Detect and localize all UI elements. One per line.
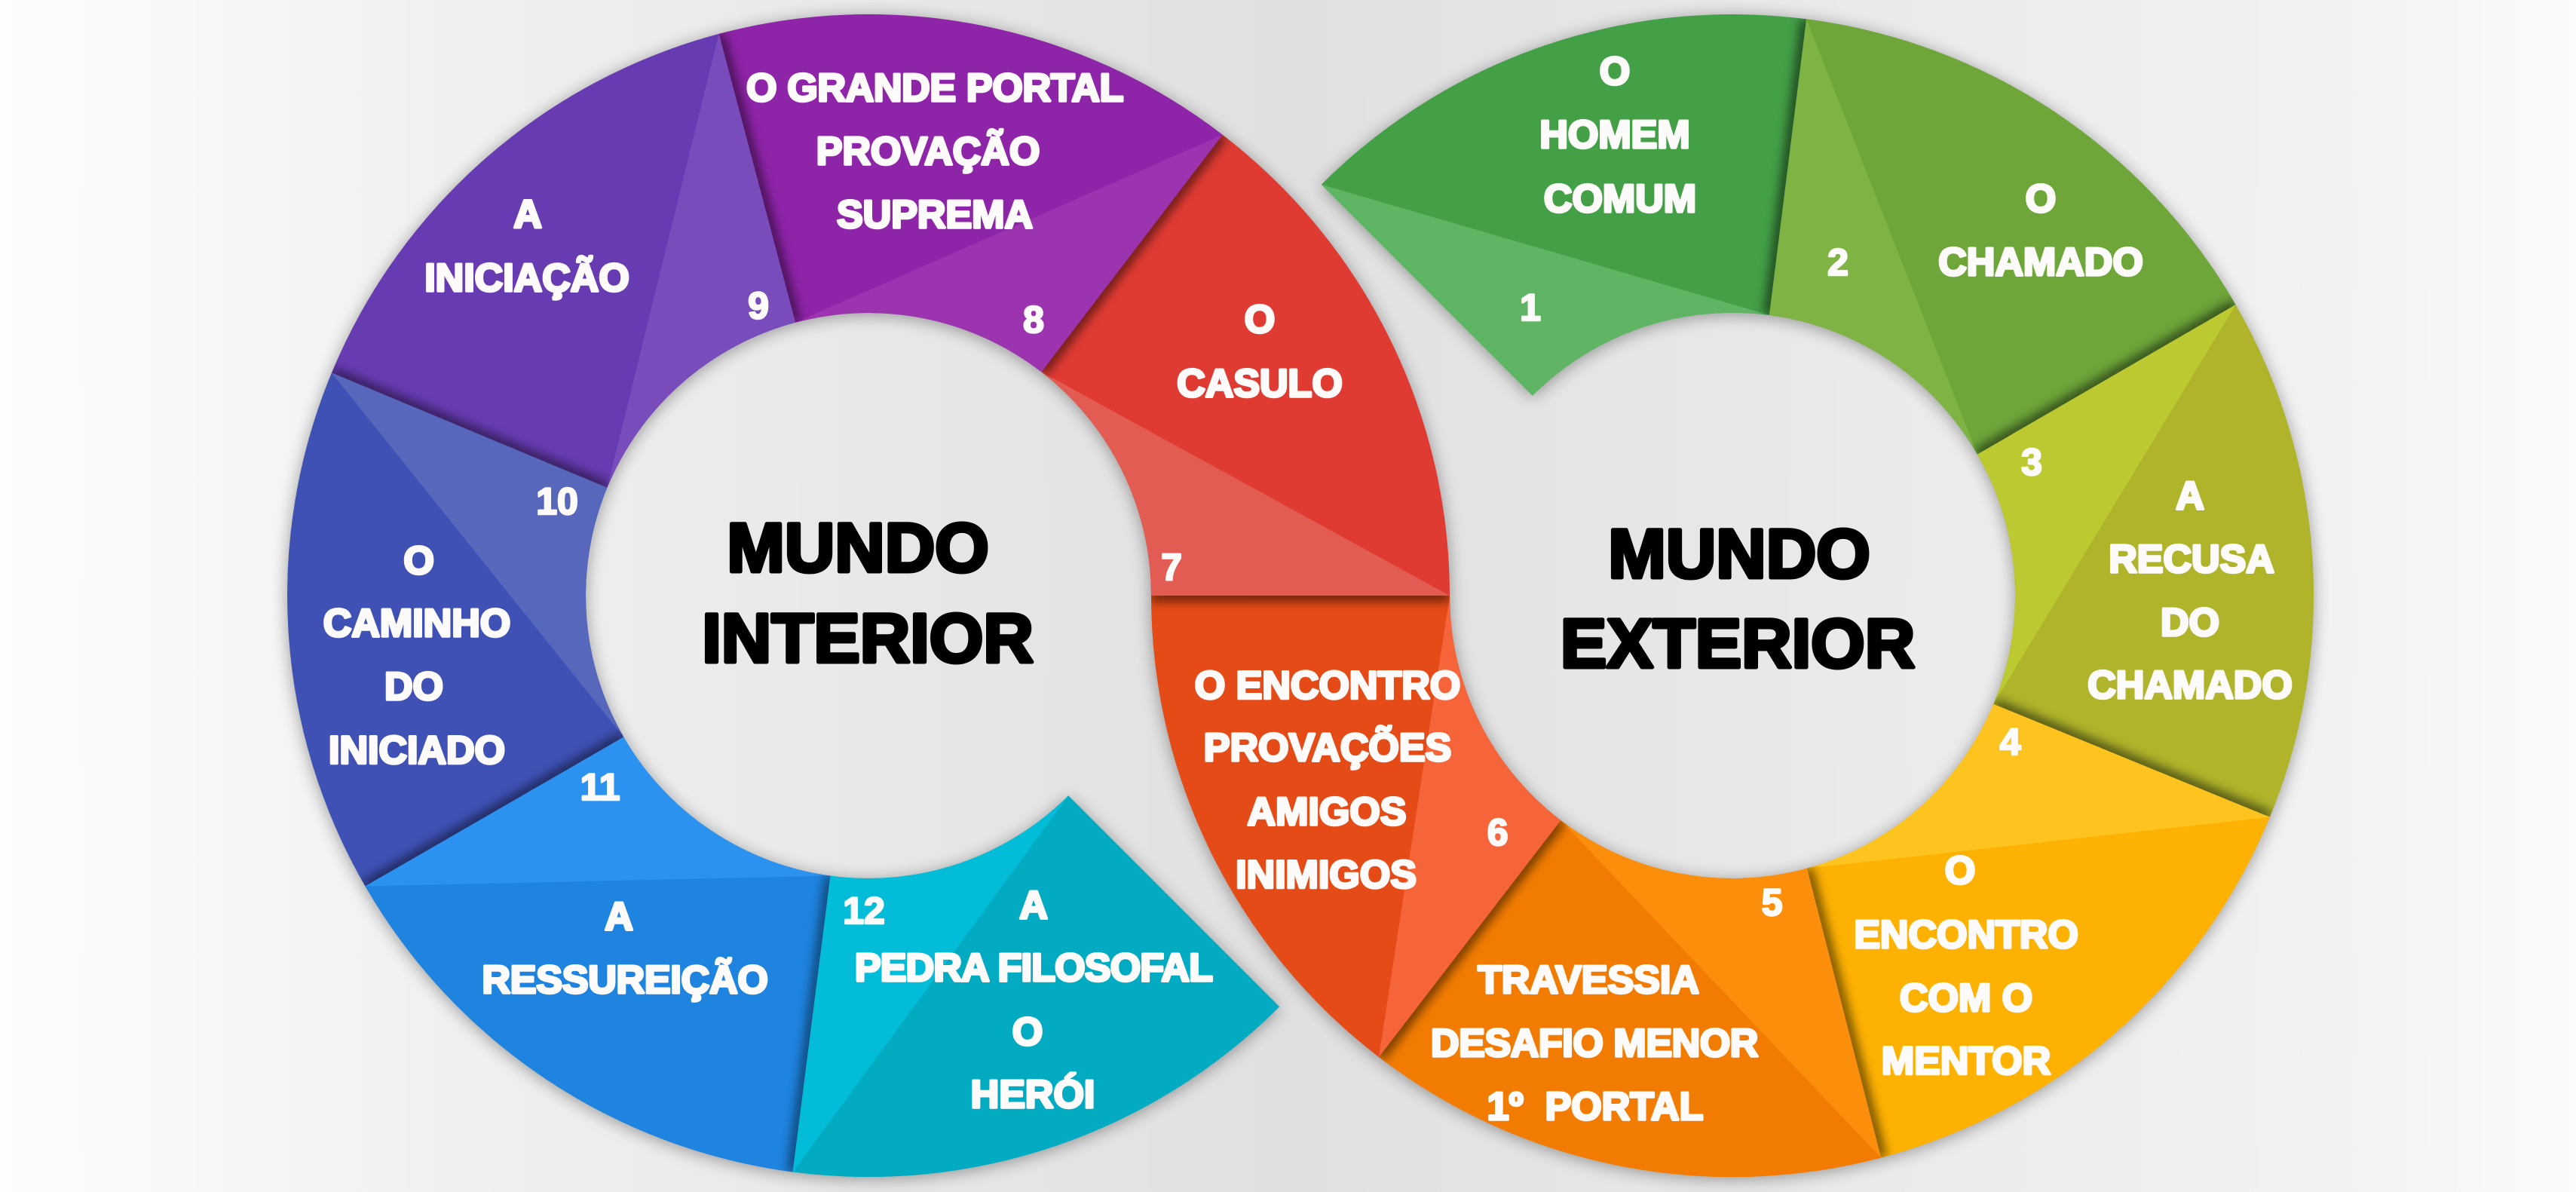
segment 10 base bbox=[287, 372, 623, 887]
label: O chamado bbox=[1938, 177, 2143, 284]
segment 6 edge shadow bbox=[1151, 590, 1450, 601]
segment 1 edge shadow bbox=[1769, 19, 1806, 315]
panel: segment 4 O encontro com o mentor bbox=[1807, 704, 2270, 1158]
heading: Mundo Exterior: MUNDO bbox=[1608, 516, 1870, 593]
segment 8 light facet bbox=[795, 135, 1223, 372]
panel: segment 6 O encontro, provações, amigos, inimigos bbox=[1151, 596, 1561, 1057]
label: O chamado: O bbox=[2026, 177, 2056, 221]
segment 2 base bbox=[1769, 19, 2236, 455]
label: O homem comum: O bbox=[1600, 50, 1630, 93]
label: O grande portal, provação suprema bbox=[746, 66, 1123, 237]
panel: segment 12 A pedra filosofal, o herói bbox=[793, 795, 1279, 1177]
label: A ressureição: A bbox=[605, 895, 633, 939]
segment 9 light facet bbox=[607, 34, 795, 488]
label: O encontro com o mentor: ENCONTRO bbox=[1854, 913, 2078, 957]
label: O encontro, provações, amigos, inimigos: AMIGOS bbox=[1248, 790, 1406, 834]
segment 1 base bbox=[1322, 14, 1806, 396]
number 9: 9 bbox=[748, 285, 769, 327]
label: O grande portal, provação suprema: SUPREMA bbox=[837, 193, 1033, 237]
label: A pedra filosofal, o herói: HERÓI bbox=[971, 1073, 1095, 1117]
label: O encontro, provações, amigos, inimigos bbox=[1195, 664, 1460, 897]
segment 12 base bbox=[793, 795, 1279, 1177]
segment 4 light facet bbox=[1807, 704, 2270, 869]
heading: Mundo Interior bbox=[702, 510, 1034, 677]
label: O casulo: CASULO bbox=[1177, 362, 1343, 406]
panel: segment 2 O chamado bbox=[1769, 19, 2236, 455]
label: O casulo bbox=[1177, 298, 1343, 406]
segment 2 edge shadow bbox=[1977, 305, 2236, 455]
label: O caminho do iniciado bbox=[323, 539, 510, 773]
label: O grande portal, provação suprema: PROVAÇÃO bbox=[816, 129, 1040, 173]
panel: segment 10 O caminho do iniciado bbox=[287, 372, 623, 887]
segment 7 light facet bbox=[1041, 372, 1450, 596]
label: A iniciação bbox=[424, 193, 629, 300]
label: O homem comum: COMUM bbox=[1544, 177, 1696, 221]
label: O homem comum: HOMEM bbox=[1539, 113, 1690, 157]
label: Travessia, desafio menor, 1º portal bbox=[1431, 958, 1758, 1129]
number 10: 10 bbox=[536, 480, 578, 522]
label: O encontro, provações, amigos, inimigos: PROVAÇÕES bbox=[1204, 725, 1451, 770]
label: A recusa do chamado: CHAMADO bbox=[2087, 663, 2293, 707]
label: A pedra filosofal, o herói bbox=[855, 884, 1212, 1117]
segment 4 edge shadow bbox=[1807, 869, 1881, 1158]
label: O grande portal, provação suprema: O GRANDE PORTAL bbox=[746, 66, 1123, 110]
label: Travessia, desafio menor, 1º portal: TRAVESSIA bbox=[1478, 958, 1699, 1002]
segment 6 light facet bbox=[1379, 596, 1561, 1057]
segment 11 base bbox=[365, 737, 831, 1172]
segment 1 light facet bbox=[1322, 185, 1769, 396]
label: O encontro com o mentor: MENTOR bbox=[1882, 1039, 2051, 1083]
number 11: 11 bbox=[580, 766, 620, 808]
panel: segment 3 A recusa do chamado bbox=[1977, 305, 2314, 817]
segment 4 base bbox=[1807, 704, 2270, 1158]
number 2: 2 bbox=[1827, 241, 1849, 283]
segment 6 base bbox=[1151, 596, 1561, 1057]
label: O chamado: CHAMADO bbox=[1938, 241, 2143, 284]
label: O encontro com o mentor: O bbox=[1945, 849, 1975, 893]
segment 5 light facet bbox=[1561, 820, 1881, 1158]
number 4: 4 bbox=[2000, 721, 2021, 763]
segment 11 edge shadow bbox=[793, 876, 831, 1172]
label: A pedra filosofal, o herói: O bbox=[1012, 1010, 1043, 1054]
number 1: 1 bbox=[1520, 287, 1541, 329]
label: O homem comum bbox=[1539, 50, 1696, 221]
label: O caminho do iniciado: O bbox=[403, 539, 434, 583]
label: A recusa do chamado: A bbox=[2176, 474, 2204, 518]
number 12: 12 bbox=[843, 890, 885, 932]
label: O encontro com o mentor bbox=[1854, 849, 2078, 1083]
segment 2 light facet bbox=[1769, 19, 1977, 455]
number 8: 8 bbox=[1023, 299, 1044, 341]
segment 3 base bbox=[1977, 305, 2314, 817]
number 3: 3 bbox=[2021, 441, 2042, 483]
segment 9 edge shadow bbox=[332, 372, 607, 488]
segment 3 light facet bbox=[1977, 305, 2236, 704]
segment 3 edge shadow bbox=[1993, 704, 2270, 817]
label: A recusa do chamado: DO bbox=[2161, 601, 2219, 645]
panel: segment 5 Travessia bbox=[1379, 820, 1881, 1177]
label: O casulo: O bbox=[1245, 298, 1275, 342]
panel: segment 11 A ressureição bbox=[365, 737, 831, 1172]
segment 10 edge shadow bbox=[365, 737, 623, 887]
label: A recusa do chamado: RECUSA bbox=[2109, 538, 2274, 581]
number 6: 6 bbox=[1487, 811, 1509, 853]
heading: Mundo Exterior bbox=[1561, 516, 1915, 682]
segment 5 base bbox=[1379, 820, 1881, 1177]
segment 7 edge shadow bbox=[1041, 135, 1223, 372]
segment 10 light facet bbox=[332, 372, 623, 737]
segment 11 light facet bbox=[365, 737, 831, 887]
heading: Mundo Exterior: EXTERIOR bbox=[1561, 605, 1915, 682]
label: Travessia, desafio menor, 1º portal: DESAFIO MENOR bbox=[1431, 1022, 1758, 1065]
label: O caminho do iniciado: DO bbox=[384, 665, 443, 709]
label: A ressureição: RESSUREIÇÃO bbox=[482, 958, 768, 1002]
segment 12 light facet bbox=[793, 795, 1068, 1172]
label: O encontro, provações, amigos, inimigos: O ENCONTRO bbox=[1195, 664, 1460, 708]
label: O encontro com o mentor: COM O bbox=[1900, 976, 2032, 1020]
segment 8 base bbox=[719, 14, 1223, 372]
heading: Mundo Interior: INTERIOR bbox=[702, 600, 1034, 677]
label: A pedra filosofal, o herói: A bbox=[1019, 884, 1048, 927]
panel: segment 1 O homem comum bbox=[1322, 14, 1806, 396]
label: A iniciação: INICIAÇÃO bbox=[424, 256, 629, 300]
label: Travessia, desafio menor, 1º portal: 1º PORTAL bbox=[1487, 1085, 1703, 1129]
panel: segment 8 O grande portal bbox=[719, 14, 1223, 372]
segment 9 base bbox=[332, 34, 795, 488]
label: A ressureição bbox=[482, 895, 768, 1002]
label: O encontro, provações, amigos, inimigos: INIMIGOS bbox=[1236, 853, 1417, 897]
segment 5 edge shadow bbox=[1379, 820, 1561, 1057]
number 7: 7 bbox=[1161, 546, 1182, 588]
label: A pedra filosofal, o herói: PEDRA FILOSOFAL bbox=[855, 946, 1212, 990]
label: A recusa do chamado bbox=[2087, 474, 2293, 707]
label: A iniciação: A bbox=[513, 193, 542, 237]
panel: segment 9 A iniciação bbox=[332, 34, 795, 488]
segment 7 base bbox=[1041, 135, 1450, 596]
number 5: 5 bbox=[1762, 881, 1783, 924]
segment 8 edge shadow bbox=[719, 34, 795, 323]
ring drop shadow bbox=[287, 17, 2314, 1179]
label: O caminho do iniciado: INICIADO bbox=[329, 729, 505, 773]
heading: Mundo Interior: MUNDO bbox=[727, 510, 989, 587]
label: O caminho do iniciado: CAMINHO bbox=[323, 602, 510, 645]
panel: segment 7 O casulo bbox=[1041, 135, 1450, 596]
